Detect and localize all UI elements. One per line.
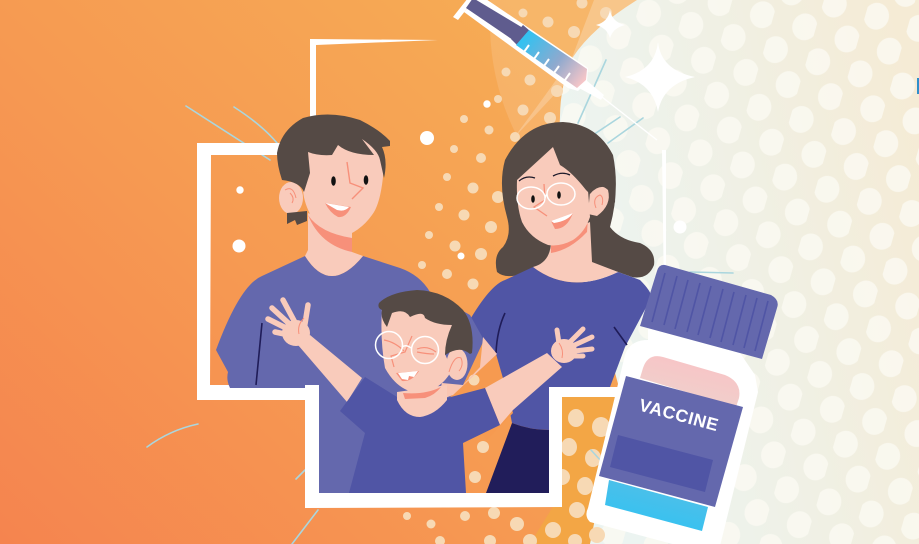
skin behind boy ear — [437, 337, 497, 401]
man neck — [305, 213, 363, 276]
woman — [468, 122, 654, 493]
woman neck — [533, 222, 618, 282]
woman teeth — [551, 213, 573, 223]
man neck tuft — [287, 211, 307, 225]
woman hair back — [496, 122, 654, 278]
woman nose — [534, 184, 547, 216]
cap ridges — [652, 273, 768, 351]
man smile — [325, 203, 351, 217]
scattered cream dots — [403, 0, 612, 544]
bottle cap — [640, 265, 778, 359]
orange gap below woman's arm — [450, 354, 513, 440]
woman fringe — [553, 123, 615, 203]
boy teeth — [398, 371, 418, 380]
boy face — [381, 305, 452, 393]
boy ear detail — [449, 358, 462, 372]
man nose — [347, 162, 363, 199]
boy shirt — [340, 377, 500, 493]
woman neck shadow — [551, 218, 588, 253]
sparkles — [596, 10, 695, 112]
woman shirt — [468, 267, 651, 430]
woman face — [517, 147, 590, 245]
woman brows and eyes — [519, 173, 570, 203]
woman shirt folds — [496, 313, 627, 353]
man shirt — [216, 256, 484, 500]
man face — [303, 133, 383, 238]
man eyes — [331, 175, 368, 186]
boy ear — [446, 348, 468, 380]
boy neck shadow — [403, 387, 441, 399]
man teeth — [325, 203, 349, 211]
woman glasses — [517, 183, 575, 209]
boy left arm and hand — [268, 300, 362, 402]
bottle label text: VACCINE — [637, 395, 721, 435]
pale dotted region — [559, 0, 919, 544]
accent lines — [147, 60, 733, 544]
man — [216, 114, 484, 500]
bottle body — [586, 326, 758, 544]
boy nose — [391, 336, 412, 367]
man hair — [277, 114, 390, 192]
boy hair — [378, 290, 473, 355]
translucent glow band — [490, 0, 640, 142]
vaccine bottle — [586, 265, 778, 544]
front frame — [305, 385, 625, 508]
boy — [268, 290, 592, 493]
man neck shadow — [308, 215, 352, 252]
white dots — [232, 100, 686, 260]
woman ear detail — [595, 195, 603, 208]
label — [599, 376, 743, 507]
dot in orange gap — [468, 374, 480, 386]
boy mouth — [396, 371, 419, 381]
boy eyes — [384, 340, 436, 354]
syringe — [453, 0, 657, 140]
boy right arm and hand — [485, 329, 592, 425]
back frame — [197, 39, 666, 400]
pink contents — [640, 356, 739, 407]
boy neck — [397, 385, 447, 417]
man ear — [279, 182, 303, 214]
woman smile — [551, 213, 573, 229]
blue contents — [605, 480, 708, 531]
man ear detail — [285, 189, 296, 203]
man shirt fold — [256, 323, 262, 385]
woman ear — [588, 186, 609, 216]
label dark panel — [610, 435, 713, 492]
boy glasses — [376, 332, 438, 364]
lower orange panel — [530, 397, 625, 544]
right edge blue tick — [917, 78, 919, 94]
woman trousers — [486, 423, 549, 493]
